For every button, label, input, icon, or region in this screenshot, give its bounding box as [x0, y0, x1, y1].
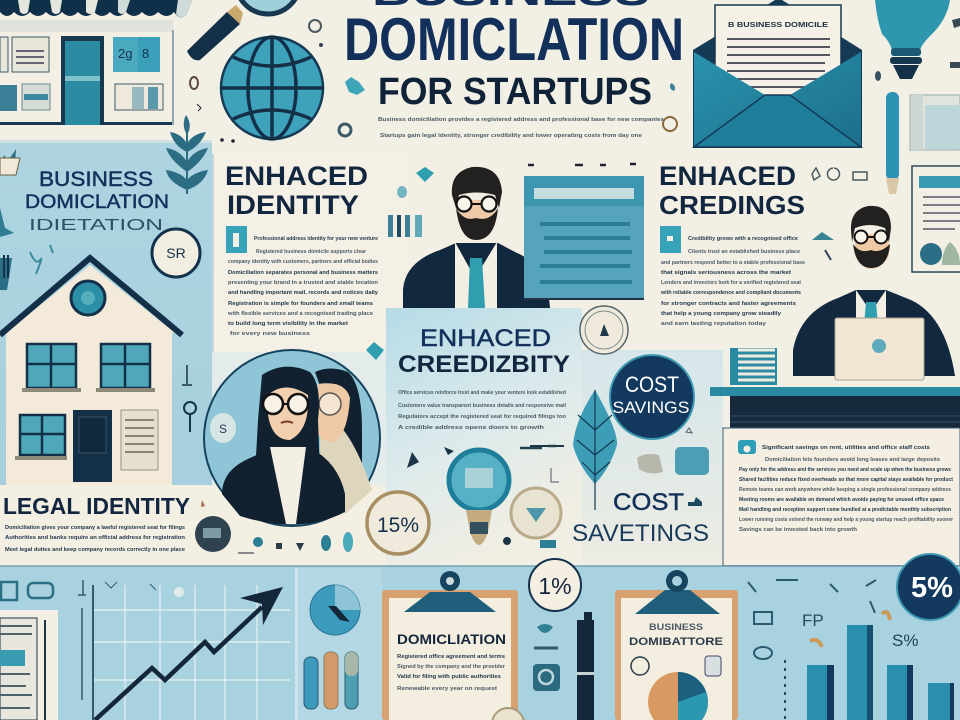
panel: legal identity [0, 485, 386, 567]
body text [739, 445, 954, 533]
badge: 1% [529, 559, 581, 611]
stat: 15%: 15% [377, 514, 419, 537]
heading [572, 489, 709, 547]
body text: Clients trust an established business place [688, 249, 800, 255]
body text: Lenders and investors look for a verified registered seat [661, 280, 801, 286]
door [61, 36, 104, 125]
document top right [912, 166, 960, 272]
body text: Registered business domicile supports clear [256, 249, 367, 255]
medallion [492, 708, 524, 720]
medallion [511, 488, 561, 538]
icon: potted plants [0, 149, 53, 290]
heading [25, 168, 169, 234]
bar capsules [304, 652, 358, 709]
panel: enhanced identity [212, 154, 402, 352]
document at left [0, 610, 58, 720]
heading: LEGAL IDENTITY [3, 493, 190, 519]
body text: Office services reinforce trust and make your venture look established [398, 390, 566, 396]
clipboard: domiciliation: Renewable every year on request [397, 686, 497, 692]
icon: dark seal [195, 516, 231, 552]
arrow [95, 607, 262, 720]
clipboard: domiciliation store [615, 570, 738, 720]
icon: pen [577, 612, 594, 720]
badge: cost savings [610, 355, 694, 439]
man at laptop [793, 206, 955, 380]
heading: ENHACED [225, 161, 368, 191]
body text: Significant savings on rent, utilities and office staff costs [762, 445, 930, 451]
clipboard: domiciliation [382, 571, 524, 720]
back woman [314, 368, 372, 514]
body text: for stronger contracts and faster agreements [661, 301, 796, 307]
body text: with flexible services and a recognised trading place [227, 311, 373, 317]
panel: enhanced credibility [367, 308, 582, 566]
body text [227, 236, 379, 337]
heading: IDIETATION [29, 217, 163, 234]
title [344, 0, 684, 113]
pie chart [648, 672, 708, 720]
icons [520, 428, 709, 482]
heading: ENHACED [659, 161, 796, 191]
clipboard: domiciliation: DOMICLIATION [397, 632, 506, 647]
front woman [222, 367, 345, 525]
icon: awning [0, 0, 192, 17]
badge: cost savings: SAVINGS [612, 398, 690, 417]
left icons [1, 582, 53, 600]
icon: magnifying glass [187, 0, 300, 60]
title: FOR STARTUPS [378, 71, 652, 113]
heading [398, 325, 570, 378]
icons and pen beside clipboard [533, 612, 594, 720]
heading [659, 161, 805, 220]
laptop [835, 318, 924, 380]
body text: Professional address identity for your new venture [254, 236, 378, 242]
small icons [201, 500, 353, 553]
body text: and partners respond better to a stable professional base [661, 260, 805, 266]
body text: Authorities and banks require an official address for registration [5, 535, 186, 541]
stat: 15% [367, 492, 429, 554]
windows and shelves: 2g [118, 46, 132, 61]
panel: cost savings background [582, 350, 723, 566]
body text: Regulators accept the registered seat for required filings too [398, 414, 567, 420]
icon: house [0, 258, 182, 485]
body text: Meeting rooms are available on demand which avoids paying for unused office space [739, 497, 944, 503]
body text: and earn lasting reputation today [661, 321, 767, 327]
scattered glyphs [748, 580, 918, 720]
clipboard: domiciliation: Signed by the company and the provider [397, 664, 506, 670]
icon: top-right clutter [875, 18, 960, 150]
body text: A credible address opens doors to growth [398, 425, 545, 431]
icon: globe [221, 37, 323, 139]
body text: and handling important mail, records and notices daily [228, 290, 379, 296]
decorative icons near credings [528, 164, 867, 260]
body text: Registration is simple for founders and small teams [228, 301, 373, 307]
icon: tag [226, 226, 247, 253]
scattered glyphs: S% [892, 631, 918, 650]
body text: for every new business [230, 331, 310, 337]
scattered glyphs: FP [802, 611, 824, 630]
body text: to build long term visibility in the market [228, 321, 348, 327]
icon: gauge circle [310, 585, 360, 635]
title subtext: Business domiciliation provides a registered address and professional base for new companies [378, 117, 664, 123]
icon: light bulb [875, 0, 950, 79]
title: DOMICLATION [344, 6, 684, 73]
panel: enhanced credings [659, 161, 805, 327]
icon: tag [660, 226, 681, 253]
title subtext: Startups gain legal identity, stronger credibility and lower operating costs from day one [380, 133, 642, 139]
title subtext [378, 117, 664, 139]
man with beard (centre) [403, 167, 550, 308]
badge: 5%: 5% [911, 572, 953, 604]
icon: leaf [573, 390, 617, 510]
body text [398, 390, 567, 431]
windows and shelves: 8 [142, 46, 149, 61]
badge: 5% [897, 554, 960, 620]
windows and shelves [0, 37, 163, 111]
badge: SR [166, 245, 186, 261]
body text: Customers value transparent business details and responsive mail [398, 403, 566, 409]
icon: envelope with letter [693, 0, 862, 148]
body text: company identity with customers, partners and official bodies [228, 259, 378, 265]
icon: door-side glyphs [182, 365, 196, 432]
icon: lens [449, 450, 509, 545]
panel: women portrait [204, 350, 386, 526]
scattered icons [407, 446, 564, 548]
panel: storefront [0, 0, 192, 126]
desk and books [710, 348, 960, 428]
body text [660, 236, 805, 327]
heading [225, 161, 368, 220]
heading: BUSINESS [39, 168, 153, 191]
heading: ENHACED [420, 325, 551, 352]
body text: presenting your brand in a trusted and stable location [228, 280, 379, 286]
icon: envelope with letter: B BUSINESS DOMICILE [728, 20, 828, 29]
speech icon [210, 413, 236, 443]
clipboard: domiciliation store: DOMIBATTORE [629, 636, 723, 648]
heading: CREDINGS [659, 190, 805, 220]
body text: Credibility grows with a recognised office [688, 236, 798, 242]
decorative icons near globe [190, 20, 677, 143]
body text: that help a young company grow steadily [661, 311, 782, 317]
icon: tag [738, 440, 756, 454]
body text: with reliable correspondence and compliant documents [660, 290, 801, 296]
heading: CREEDIZBITY [398, 351, 570, 378]
body text: Domiciliation gives your company a lawful registered seat for filings [5, 525, 185, 531]
clipboard: domiciliation: Registered office agreement and terms [397, 654, 505, 660]
ring and shield icons [366, 306, 628, 360]
panel: bottom band [0, 554, 960, 720]
icons left of man [388, 167, 434, 237]
body text: Savings can be invested back into growth [739, 527, 858, 533]
body text: Domiciliation separates personal and business matters [228, 270, 378, 276]
heading: SAVETINGS [572, 520, 709, 547]
heading: IDENTITY [227, 190, 359, 220]
line chart [78, 580, 290, 720]
body text [5, 525, 186, 553]
panel: cost savings lower [520, 390, 709, 547]
body text: Domiciliation lets founders avoid long leases and large deposits [765, 457, 940, 463]
badge [152, 229, 200, 277]
heading: DOMICLATION [25, 192, 169, 213]
bar chart [807, 625, 954, 720]
icon: pen [886, 92, 899, 194]
icon: fern [166, 115, 208, 194]
clipboard: domiciliation: Valid for filing with public authorities [397, 674, 501, 680]
clipboard: domiciliation store: BUSINESS [649, 622, 703, 632]
body text: Meet legal duties and keep company records correctly in one place [5, 547, 185, 553]
screen panel [524, 176, 644, 300]
heading: COST [613, 489, 684, 516]
badge: 1%: 1% [538, 573, 572, 599]
body text: that signals seriousness across the market [661, 270, 791, 276]
panel: business domiciliation identity [0, 140, 212, 486]
panel: savings details [723, 428, 960, 566]
badge: cost savings: COST [625, 372, 679, 397]
speech icon: S [219, 422, 227, 436]
panel: enhanced credentials area background [402, 154, 722, 354]
